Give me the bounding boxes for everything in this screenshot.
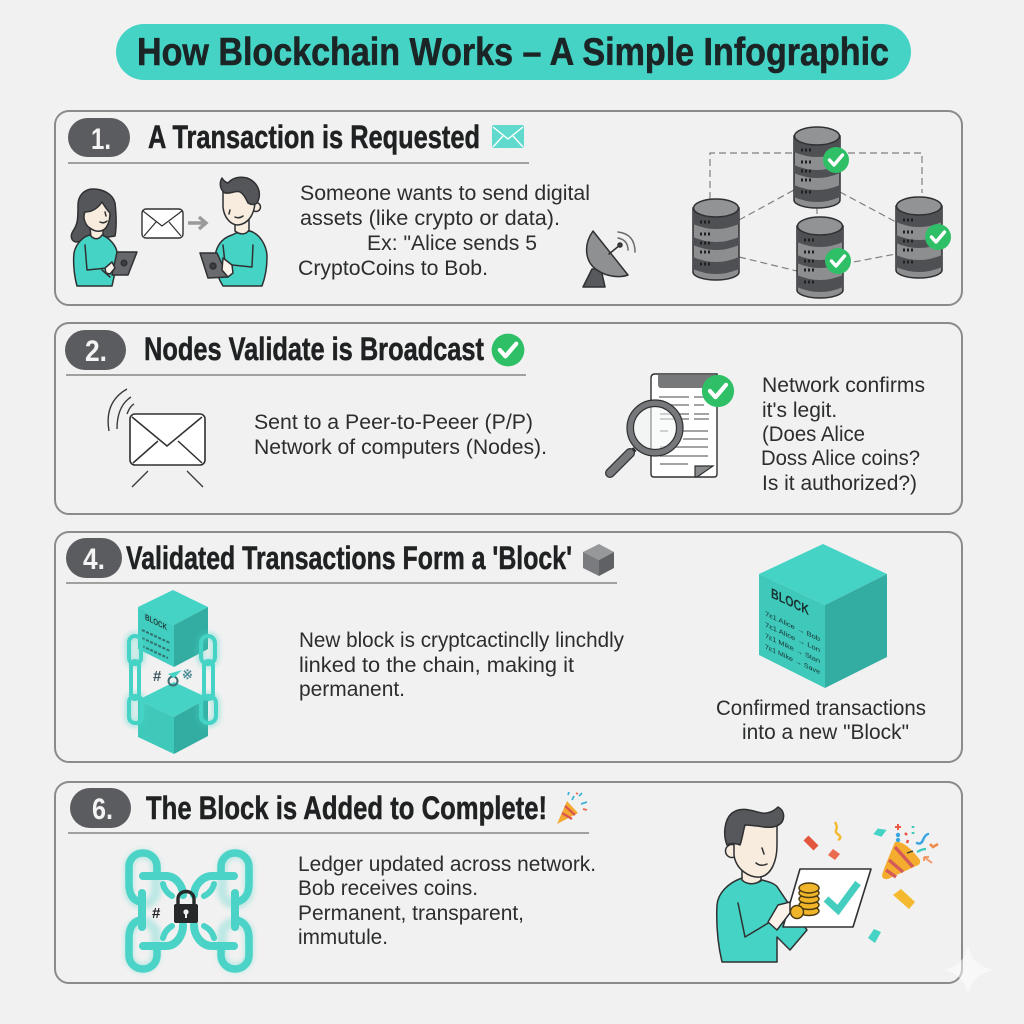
step 6 description: Bob receives coins.: [298, 877, 478, 900]
icon: linked blocks: [129, 590, 216, 754]
icon: envelope with arrow: [142, 209, 206, 238]
hash and lock symbols between blocks: [153, 667, 193, 686]
step 6 description: [298, 853, 596, 949]
icon: green check: [492, 334, 524, 366]
upper block: BLOCK: [145, 612, 167, 633]
icon: Bob with tablet and coins: [717, 807, 871, 962]
step 1 description: assets (like crypto or data).: [300, 207, 560, 230]
hash and lock symbols between blocks: ※: [182, 667, 193, 682]
step 6 heading: The Block is Added to Complete!: [146, 790, 547, 826]
lower block: [138, 682, 208, 754]
step 2 heading: Nodes Validate is Broadcast: [144, 331, 484, 367]
step 6 description: immutule.: [298, 926, 388, 949]
step 4 left description: permanent.: [299, 678, 405, 701]
sparkle watermark: [944, 945, 993, 995]
panel: step 2: [55, 323, 962, 514]
step 1 description: Someone wants to send digital: [300, 182, 590, 205]
step 2 left description: [254, 411, 547, 459]
icon: server top with check: [794, 127, 849, 208]
step 2 left description: Network of computers (Nodes).: [254, 436, 547, 459]
step 2 right description: Network confirms: [762, 374, 925, 397]
step 2 right description: (Does Alice: [762, 423, 865, 446]
step 1 description: [298, 182, 590, 280]
icon: grey cube: [583, 544, 614, 576]
icon: big block: [759, 544, 887, 688]
step 4 number badge: 4.: [83, 543, 105, 576]
icon: satellite dish: [583, 231, 635, 287]
step 1 description: Ex: "Alice sends 5: [367, 232, 537, 255]
step 2 right description: [761, 374, 925, 495]
icon: big block: 7ɛ1 Alice → Lon: [765, 622, 820, 654]
icon: Alice with tablet: [71, 189, 137, 286]
step 1 number badge: 1.: [91, 123, 111, 156]
step 4 left description: New block is cryptcactinclly linchdly: [299, 629, 624, 652]
step 6 number badge: 6.: [92, 793, 113, 826]
step 1 heading: A Transaction is Requested: [148, 119, 480, 155]
icon: server bottom with check: [797, 217, 851, 298]
step 4 right description: Confirmed transactions: [716, 697, 926, 720]
chain links: [129, 636, 216, 723]
icon: server right with check: [896, 197, 951, 278]
icon: broadcast envelope: [108, 389, 205, 487]
step 4 right description: into a new "Block": [742, 721, 909, 744]
step 4 right description: [716, 697, 926, 744]
icon: document under magnifier with check: [610, 374, 734, 477]
hash and lock symbols between blocks: #: [153, 668, 162, 685]
icon: server left: [693, 199, 739, 280]
step 2 number badge: [65, 330, 126, 370]
icon: big block: BLOCK: [771, 586, 809, 619]
panel: step 6: [55, 782, 962, 983]
step 1 number badge: [68, 118, 130, 157]
icon: chain with lock: [129, 853, 249, 969]
step 2 right description: Is it authorized?): [762, 472, 917, 495]
step 2 right description: it's legit.: [762, 399, 837, 422]
panel: step 1: [55, 111, 962, 305]
step 6 description: Ledger updated across network.: [298, 853, 596, 876]
step 2 left description: Sent to a Peer-to-Peeer (P/P): [254, 411, 533, 434]
step 2 number badge: 2.: [85, 335, 107, 368]
step 4 left description: linked to the chain, making it: [299, 654, 574, 677]
icon: teal envelope: [492, 125, 524, 148]
upper block: [138, 590, 208, 667]
icon: big block: 7ɛ1 Alice → Bob: [765, 611, 820, 643]
step 6 description: Permanent, transparent,: [298, 902, 524, 925]
step 4 heading: Validated Transactions Form a 'Block': [126, 540, 572, 576]
step 6 number badge: [70, 788, 131, 828]
icon: chain with lock: #: [152, 905, 161, 922]
step 4 left description: [299, 629, 624, 701]
step 4 number badge: [66, 538, 122, 578]
step 1 description: CryptoCoins to Bob.: [298, 257, 488, 280]
title: How Blockchain Works – A Simple Infographic: [137, 31, 889, 74]
step 2 right description: Doss Alice coins?: [761, 447, 920, 470]
icon: Bob with tablet: [200, 177, 267, 286]
title: [116, 24, 911, 80]
icon: big block: 7ɛ1 Mike → Save: [765, 644, 820, 676]
icon: party popper and confetti: [806, 822, 938, 943]
icon: small party popper: [557, 792, 587, 824]
network connection lines: [710, 153, 922, 271]
panel: step 4: [55, 532, 962, 762]
icon: big block: 7ɛ1 Mike → Stan: [765, 633, 820, 665]
